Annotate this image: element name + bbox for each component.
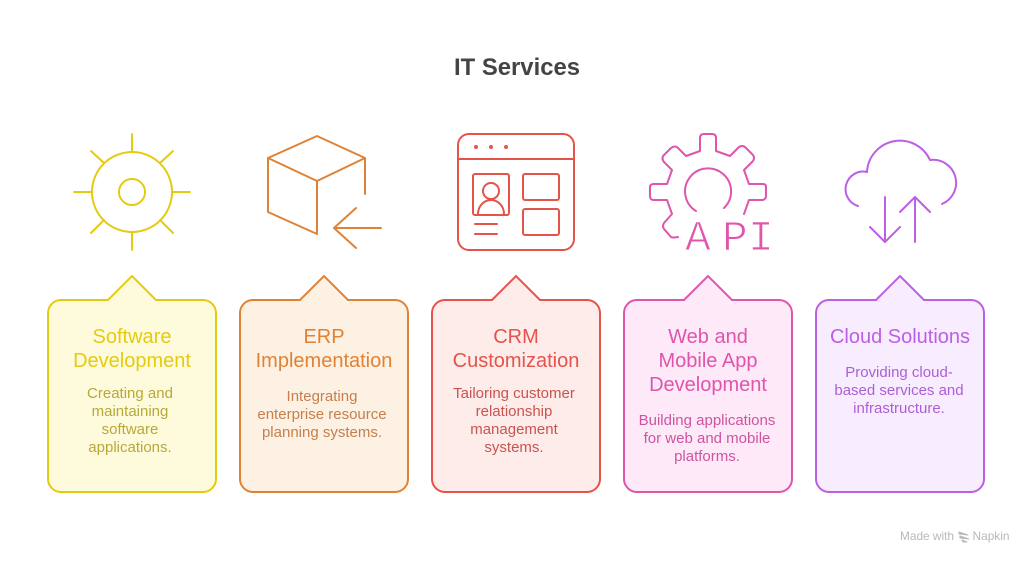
description: erp implementation: planning systems. bbox=[262, 424, 382, 441]
heading: web and mobile app development: Web and bbox=[668, 326, 748, 348]
card: crm customization bbox=[432, 276, 600, 492]
heading: web and mobile app development: Mobile App bbox=[659, 350, 757, 372]
heading: software development: Development bbox=[73, 350, 191, 372]
card: cloud solutions bbox=[816, 276, 984, 492]
description: crm customization: Tailoring customer bbox=[453, 385, 575, 402]
heading: crm customization: CRM bbox=[493, 326, 539, 348]
description: cloud solutions: based services and bbox=[834, 382, 964, 399]
description: web and mobile app development: Building applications bbox=[639, 412, 775, 429]
description: crm customization: management bbox=[470, 421, 559, 438]
card: web and mobile app development bbox=[624, 276, 792, 492]
heading: erp implementation: Implementation bbox=[256, 350, 392, 372]
description: cloud solutions: Providing cloud- bbox=[845, 364, 953, 381]
heading: software development: Software bbox=[93, 326, 171, 348]
icon: api gear bbox=[650, 134, 774, 263]
description: web and mobile app development: platforms. bbox=[674, 448, 740, 465]
icon: sun gear bbox=[74, 134, 190, 250]
watermark: made with napkin bbox=[900, 529, 1010, 543]
title: IT Services bbox=[454, 54, 580, 81]
description: crm customization: systems. bbox=[484, 439, 544, 456]
description: cloud solutions: infrastructure. bbox=[853, 400, 945, 417]
heading: crm customization: Customization bbox=[453, 350, 579, 372]
description: software development: maintaining bbox=[92, 403, 168, 420]
description: software development: Creating and bbox=[87, 385, 173, 402]
icon label: API: API bbox=[685, 214, 774, 263]
panel: web and mobile app development bbox=[624, 134, 792, 492]
description: erp implementation: enterprise resource bbox=[257, 406, 387, 423]
panel: erp implementation bbox=[240, 136, 408, 492]
description: erp implementation: Integrating bbox=[287, 388, 357, 405]
icon: box with arrow bbox=[268, 136, 381, 248]
heading: web and mobile app development: Development bbox=[649, 374, 767, 396]
icon: browser window with profile bbox=[458, 134, 574, 250]
heading: cloud solutions: Cloud Solutions bbox=[830, 326, 970, 348]
panel: crm customization bbox=[432, 134, 600, 492]
description: web and mobile app development: for web and mobile bbox=[644, 430, 770, 447]
description: software development: software bbox=[102, 421, 158, 438]
card: erp implementation bbox=[240, 276, 408, 492]
panel: software development bbox=[48, 134, 216, 492]
description: software development: applications. bbox=[88, 439, 172, 456]
watermark: made with napkin: Napkin bbox=[972, 529, 1010, 543]
icon: cloud with arrows bbox=[846, 141, 956, 242]
card: software development bbox=[48, 276, 216, 492]
panel: cloud solutions bbox=[816, 141, 984, 492]
heading: erp implementation: ERP bbox=[303, 326, 345, 348]
icon: napkin logo bbox=[959, 532, 969, 542]
watermark: made with napkin: Made with bbox=[900, 529, 954, 543]
description: crm customization: relationship bbox=[476, 403, 552, 420]
